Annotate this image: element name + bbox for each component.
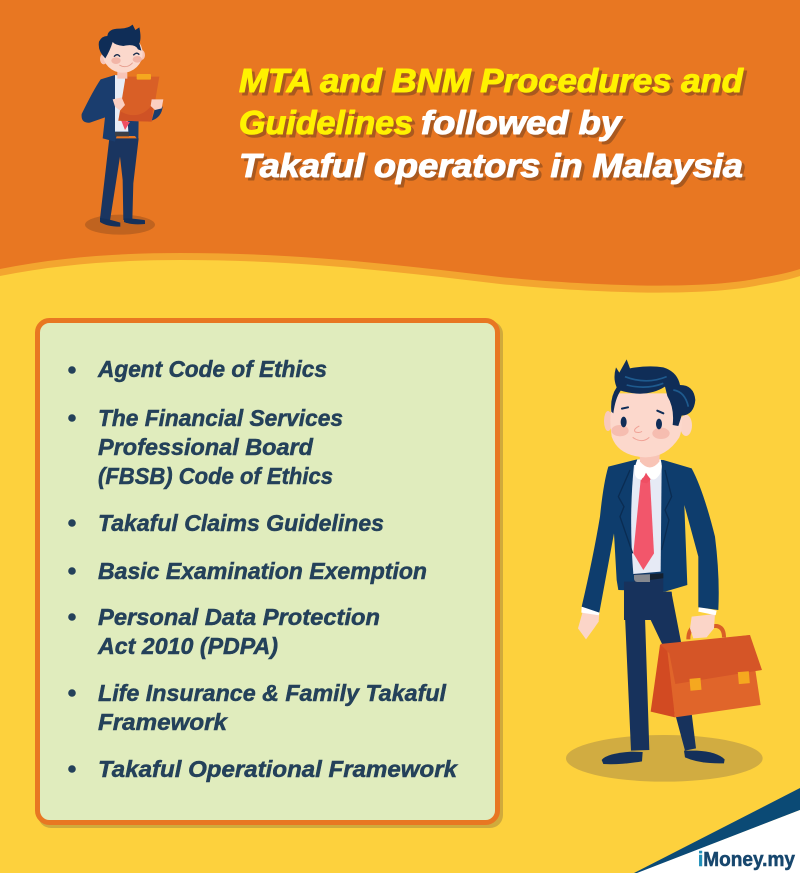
title: Guidelines: [239, 104, 413, 141]
torso, head and arms: [581, 359, 719, 620]
title: Takaful operators in Malaysia: [242, 150, 746, 187]
bullet list: Personal Data Protection: [98, 604, 380, 630]
bullet list: The Financial Services: [98, 405, 343, 431]
bullet list: Act 2010 (PDPA): [97, 633, 278, 659]
icon: man with clipboard: [82, 25, 163, 235]
bullet list: Basic Examination Exemption: [98, 558, 427, 584]
bullet list: [68, 356, 459, 782]
bullet list: Agent Code of Ethics: [97, 356, 327, 382]
title: [239, 62, 747, 187]
bullet list: Takaful Operational Framework: [98, 756, 459, 782]
title: Guidelines: [242, 107, 416, 144]
icon: businessman with briefcase: [566, 359, 763, 782]
header band: orange wave: [0, 0, 800, 293]
panel: list of procedures: [38, 320, 503, 828]
bullet list: Life Insurance & Family Takaful: [98, 680, 446, 706]
title: followed by: [424, 107, 626, 144]
bullet list: Framework: [98, 709, 229, 735]
logo: iMoney.my: iMoney.my: [698, 849, 796, 871]
legs, shoes and briefcase: [566, 593, 763, 782]
bullet list: Takaful Claims Guidelines: [98, 510, 384, 536]
bullet list: (FBSB) Code of Ethics: [98, 463, 333, 489]
corner logo ribbon: [634, 788, 800, 873]
title: MTA and BNM Procedures and: [239, 62, 744, 99]
bullet list: Professional Board: [98, 434, 314, 460]
title: Takaful operators in Malaysia: [239, 147, 743, 184]
title: followed by: [421, 104, 623, 141]
title: MTA and BNM Procedures and: [242, 65, 747, 102]
